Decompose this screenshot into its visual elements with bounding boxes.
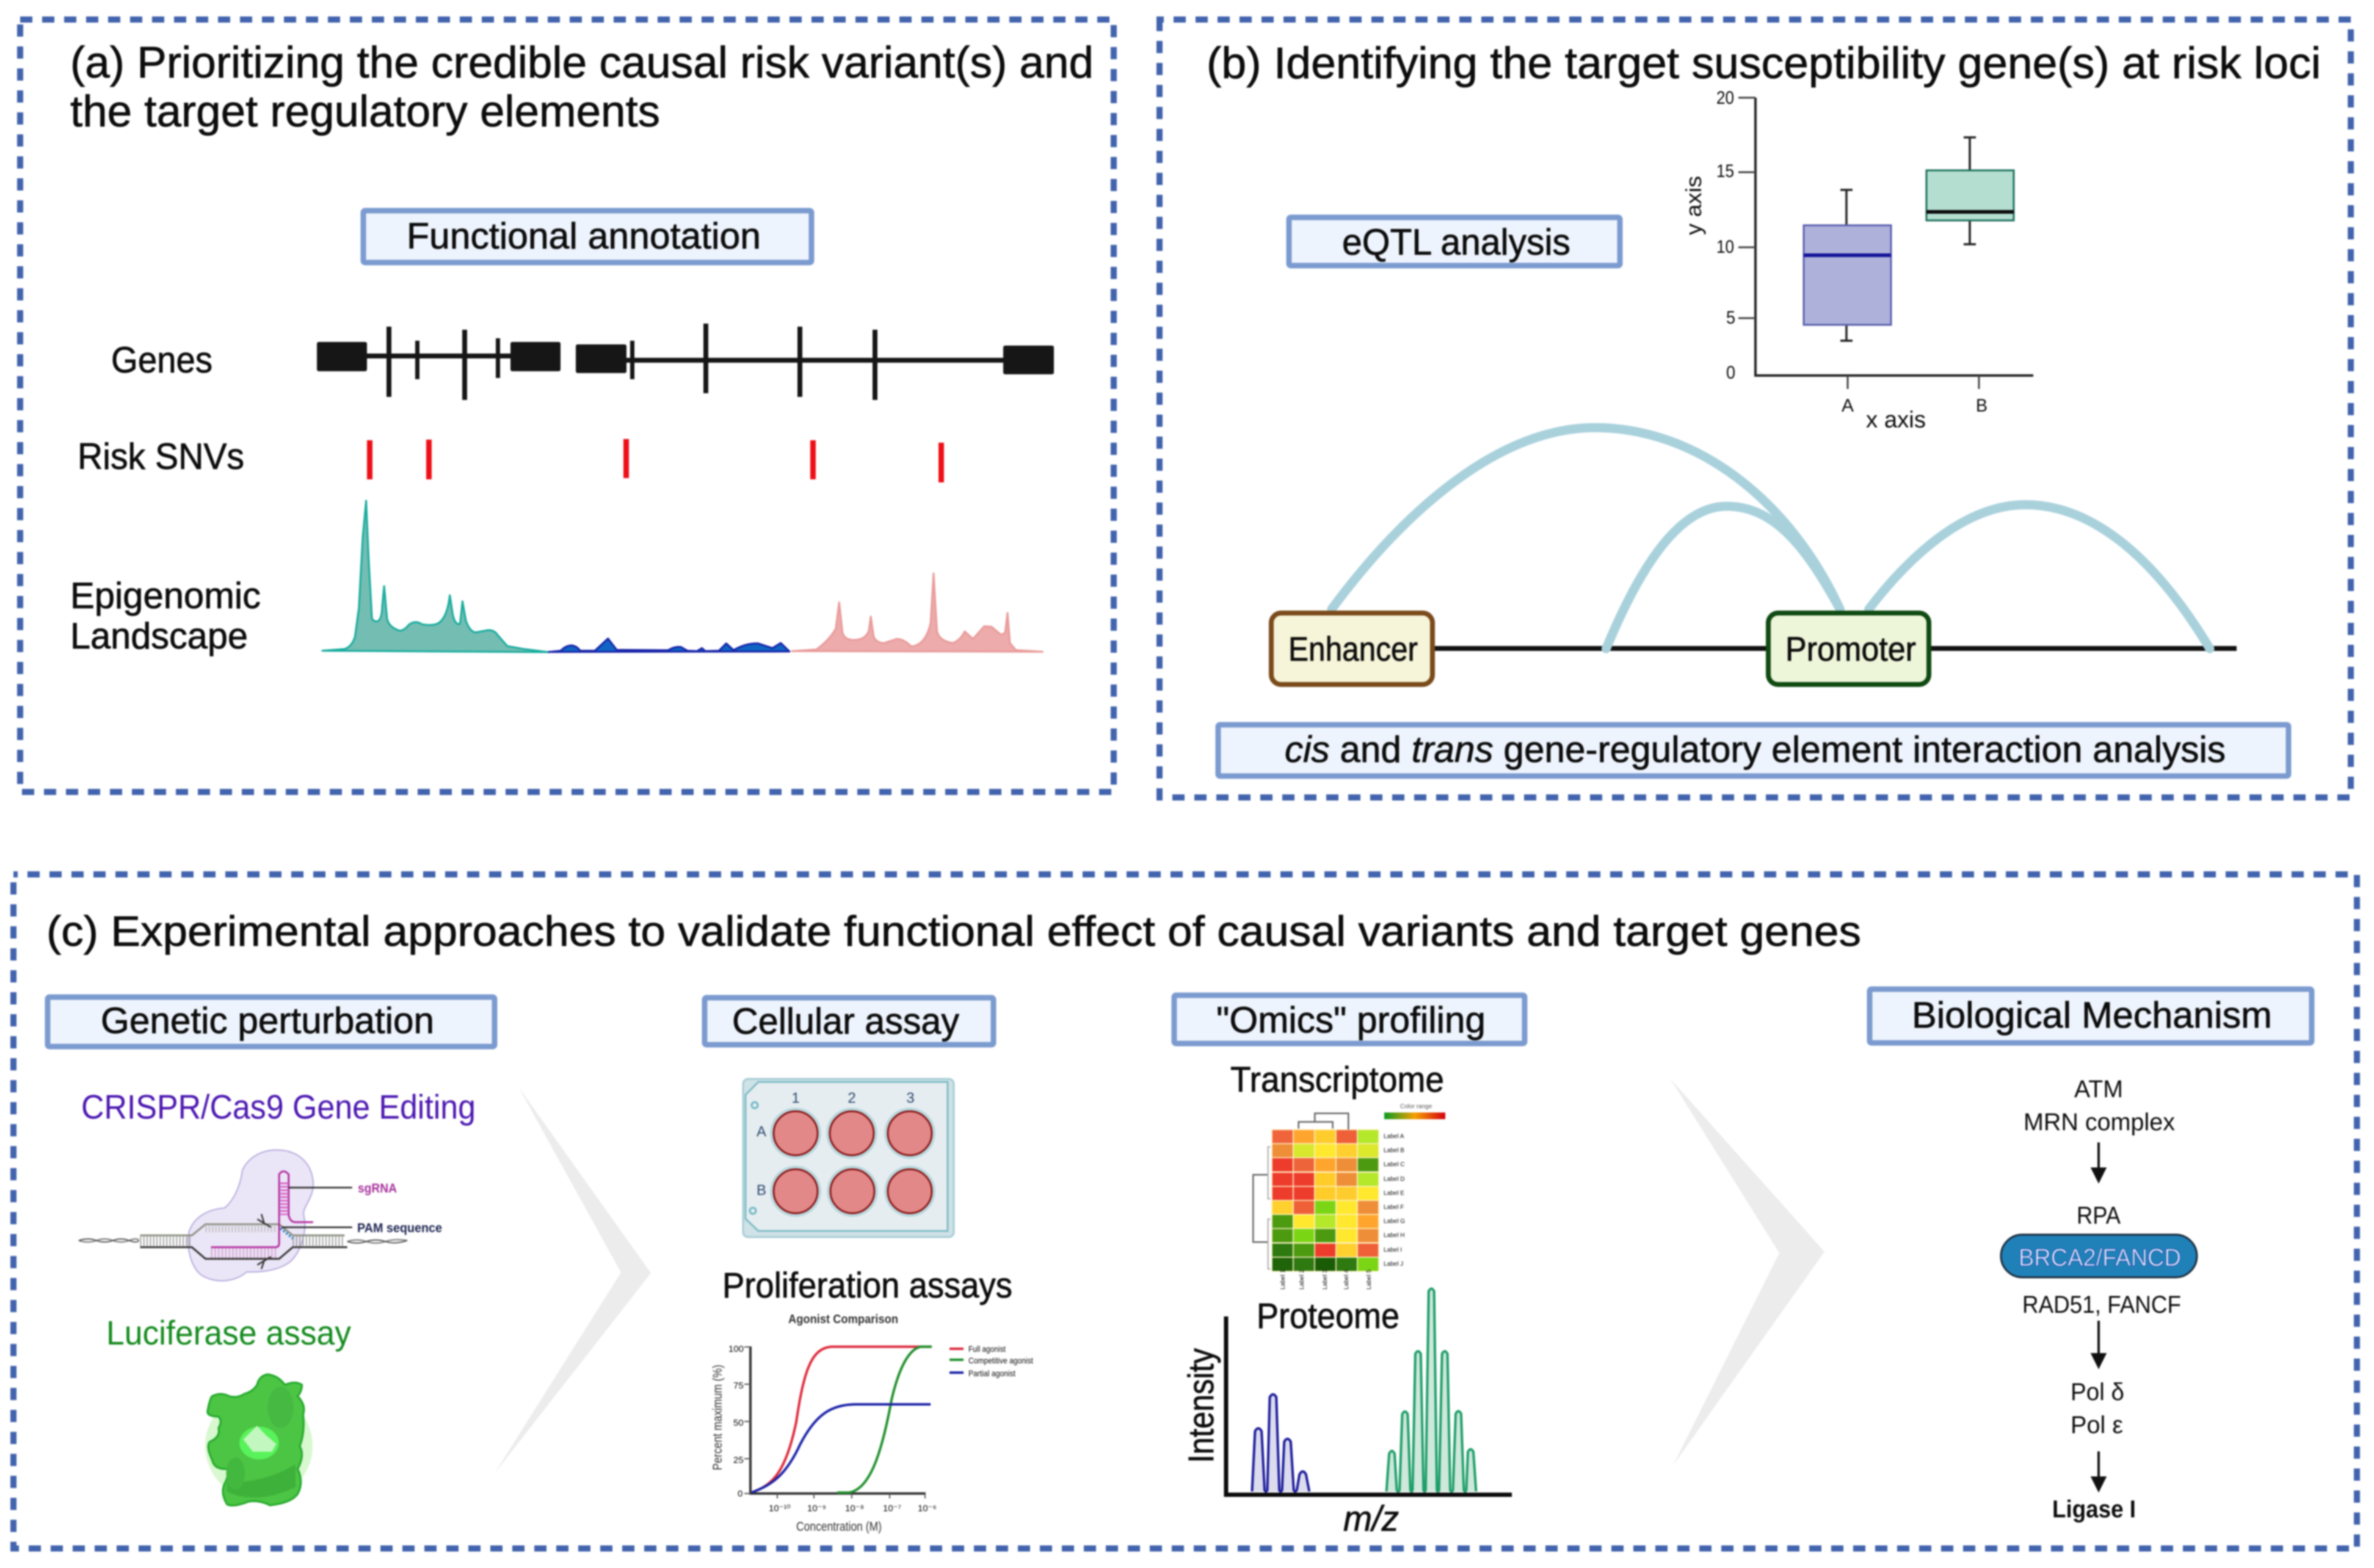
label: PAM sequence: PAM sequence [357, 1221, 442, 1235]
label: Epigenomic Landscape [70, 575, 261, 656]
colour scale legend: Color range [1400, 1103, 1432, 1110]
heatmap column labels: Label 1 [1280, 1269, 1287, 1290]
text: Pol delta: Pol δ [2071, 1379, 2124, 1406]
chart: agonist dose-response curves [711, 1313, 1033, 1534]
chart: agonist dose-response curves: 25 [733, 1455, 744, 1465]
chart: agonist dose-response curves: 0 [738, 1489, 742, 1499]
heatmap column labels [1280, 1269, 1373, 1290]
heading: Luciferase assay: Luciferase assay [106, 1313, 351, 1352]
label box: Biological Mechanism [1870, 989, 2312, 1043]
node: Enhancer: Enhancer [1288, 630, 1418, 668]
axis title: concentration: Concentration (M) [796, 1520, 882, 1534]
arrow: RAD51 to Pol [2093, 1321, 2105, 1367]
chromatin baseline [1435, 646, 2237, 651]
axis title: y axis: y axis [1681, 176, 1706, 235]
box plot chart: A [1842, 396, 1854, 416]
node: Promoter: Promoter [1785, 630, 1916, 668]
gene track [317, 324, 1054, 400]
chart: agonist dose-response curves: 100 [728, 1344, 744, 1354]
label: Genes: Genes [111, 339, 212, 380]
arrow: Pol to Ligase [2093, 1451, 2105, 1490]
label: Epigenomic Landscape: Epigenomic [70, 575, 261, 616]
heading: CRISPR/Cas9 Gene Editing: CRISPR/Cas9 Gene Editing [81, 1087, 476, 1126]
icon: six-well plate: 3 [906, 1090, 915, 1106]
text: ATM: ATM [2074, 1076, 2123, 1103]
heatmap column labels: Label 4 [1343, 1269, 1350, 1290]
heatmap row labels: Label D [1384, 1176, 1404, 1183]
axis title: Intensity: Intensity [1182, 1348, 1221, 1463]
heading: Proliferation assays: Proliferation assays [722, 1266, 1012, 1305]
label box: Genetic perturbation: Genetic perturbation [101, 1000, 434, 1041]
text: Ligase I: Ligase I [2052, 1496, 2136, 1523]
box plot chart: B [1976, 396, 1987, 416]
label: Risk SNVs: Risk SNVs [78, 436, 244, 477]
box plot chart: 15 [1716, 161, 1734, 181]
icon: six-well plate: 2 [848, 1090, 856, 1106]
label box: Functional annotation: Functional annotation [407, 216, 761, 256]
chart: agonist dose-response curves: 10⁻¹⁰ [769, 1503, 791, 1514]
panel b: target gene identification [1160, 20, 2351, 797]
box plot chart: 10 [1716, 237, 1734, 257]
text: MRN complex: MRN complex [2024, 1109, 2175, 1136]
dendrograms [1253, 1113, 1348, 1269]
heatmap row labels: Label B [1384, 1147, 1404, 1154]
epigenomic landscape tracks [322, 501, 1042, 652]
chart: agonist dose-response curves: 75 [733, 1381, 744, 1391]
column: biological mechanism [1870, 989, 2312, 1523]
column: omics profiling [1174, 995, 1525, 1539]
icon: six-well plate: A [757, 1123, 766, 1140]
label box: cis and trans analysis [1218, 725, 2289, 776]
text: RPA: RPA [2077, 1202, 2121, 1229]
label box: Cellular assay: Cellular assay [732, 1001, 959, 1042]
heatmap row labels: Label G [1384, 1218, 1405, 1225]
icon: luciferase protein [205, 1374, 313, 1506]
label box: Cellular assay [705, 998, 993, 1045]
chart: mass spectrum [1182, 1289, 1512, 1539]
chart: agonist dose-response curves: 10⁻⁹ [807, 1503, 826, 1514]
box A [1804, 190, 1891, 341]
chart: agonist dose-response curves: 10⁻⁸ [845, 1503, 864, 1514]
node: Promoter [1768, 613, 1929, 684]
heatmap row labels: Label F [1384, 1204, 1404, 1211]
node: Enhancer [1271, 613, 1432, 684]
box plot chart: 0 [1726, 363, 1735, 383]
label box: Omics profiling [1174, 995, 1525, 1044]
label box: eQTL analysis [1289, 217, 1620, 266]
label box: Omics profiling: "Omics" profiling [1216, 1000, 1486, 1040]
axis title: m/z: m/z [1343, 1499, 1399, 1539]
text: RAD51, FANCF: RAD51, FANCF [2022, 1291, 2181, 1318]
column: genetic perturbation [48, 997, 495, 1506]
icon: six-well plate [743, 1079, 954, 1237]
chart: agonist dose-response curves: 50 [733, 1418, 744, 1428]
arrow: chevron left [495, 1087, 651, 1473]
risk SNV markers [367, 439, 944, 482]
label box: eQTL analysis: eQTL analysis [1342, 222, 1570, 263]
chart legend: Competitive agonist [968, 1356, 1033, 1365]
box B [1926, 137, 2014, 244]
panel a: functional annotation [20, 20, 1114, 792]
icon: CRISPR/Cas9 complex [79, 1150, 442, 1281]
label: sgRNA: sgRNA [358, 1181, 397, 1196]
colour scale legend [1384, 1103, 1445, 1119]
heading: panel b title: (b) Identifying the target susceptibility gene(s) at risk loci [1207, 39, 2321, 88]
heading: panel a title [70, 38, 1094, 136]
axis title: x axis: x axis [1866, 407, 1926, 433]
label box: Genetic perturbation [48, 997, 495, 1047]
heading: panel a title: (a) Prioritizing the credible causal risk variant(s) and [70, 38, 1094, 87]
panel c: experimental approaches [13, 874, 2357, 1548]
pill: BRCA2/FANCD: BRCA2/FANCD [2019, 1244, 2181, 1271]
heatmap column labels: Label 5 [1366, 1269, 1373, 1290]
heatmap row labels: Label E [1384, 1190, 1404, 1197]
label box: cis and trans analysis: cis and trans gene-regulatory element interaction analysis [1285, 729, 2226, 770]
icon: six-well plate: B [757, 1182, 766, 1199]
heatmap row labels: Label J [1384, 1261, 1403, 1268]
chart: agonist dose-response curves: 10⁻⁶ [918, 1503, 937, 1514]
chart: agonist dose-response curves: 10⁻⁷ [883, 1503, 901, 1514]
heatmap row labels: Label I [1384, 1247, 1402, 1254]
chart legend: Partial agonist [968, 1368, 1015, 1378]
pill: BRCA2/FANCD [2001, 1235, 2197, 1277]
chart legend: Full agonist [968, 1344, 1006, 1354]
heatmap row labels: Label H [1384, 1232, 1404, 1239]
column: cellular assay [705, 998, 1033, 1534]
heading: panel a title: the target regulatory elements [70, 87, 660, 136]
label box: Functional annotation [363, 211, 811, 263]
icon: six-well plate: 1 [791, 1090, 800, 1106]
box plot chart: 5 [1726, 308, 1735, 328]
axis title: percent maximum: Percent maximum (%) [711, 1365, 725, 1470]
chart legend [949, 1344, 1033, 1378]
heatmap row labels: Label C [1384, 1161, 1404, 1168]
arrow: chevron right [1670, 1078, 1824, 1465]
arrow: MRN to RPA [2093, 1142, 2105, 1181]
heatmap row labels [1384, 1133, 1405, 1268]
chromatin interaction arcs [1332, 427, 2210, 648]
heatmap column labels: Label 2 [1299, 1269, 1305, 1290]
heading: Proteome: Proteome [1257, 1296, 1399, 1336]
label box: Biological Mechanism: Biological Mechanism [1912, 995, 2272, 1036]
heatmap column labels: Label 3 [1322, 1269, 1329, 1290]
chart title: Agonist Comparison [788, 1313, 898, 1326]
heading: Transcriptome: Transcriptome [1230, 1060, 1444, 1100]
heatmap row labels: Label A [1384, 1133, 1404, 1140]
heatmap [1253, 1103, 1445, 1290]
box plot chart [1681, 88, 2033, 433]
heading: panel c title: (c) Experimental approaches to validate functional effect of causal variants and target genes [46, 907, 1861, 955]
label: Epigenomic Landscape: Landscape [70, 615, 248, 656]
box plot chart: 20 [1716, 88, 1734, 108]
text: Pol epsilon: Pol ε [2071, 1412, 2123, 1439]
